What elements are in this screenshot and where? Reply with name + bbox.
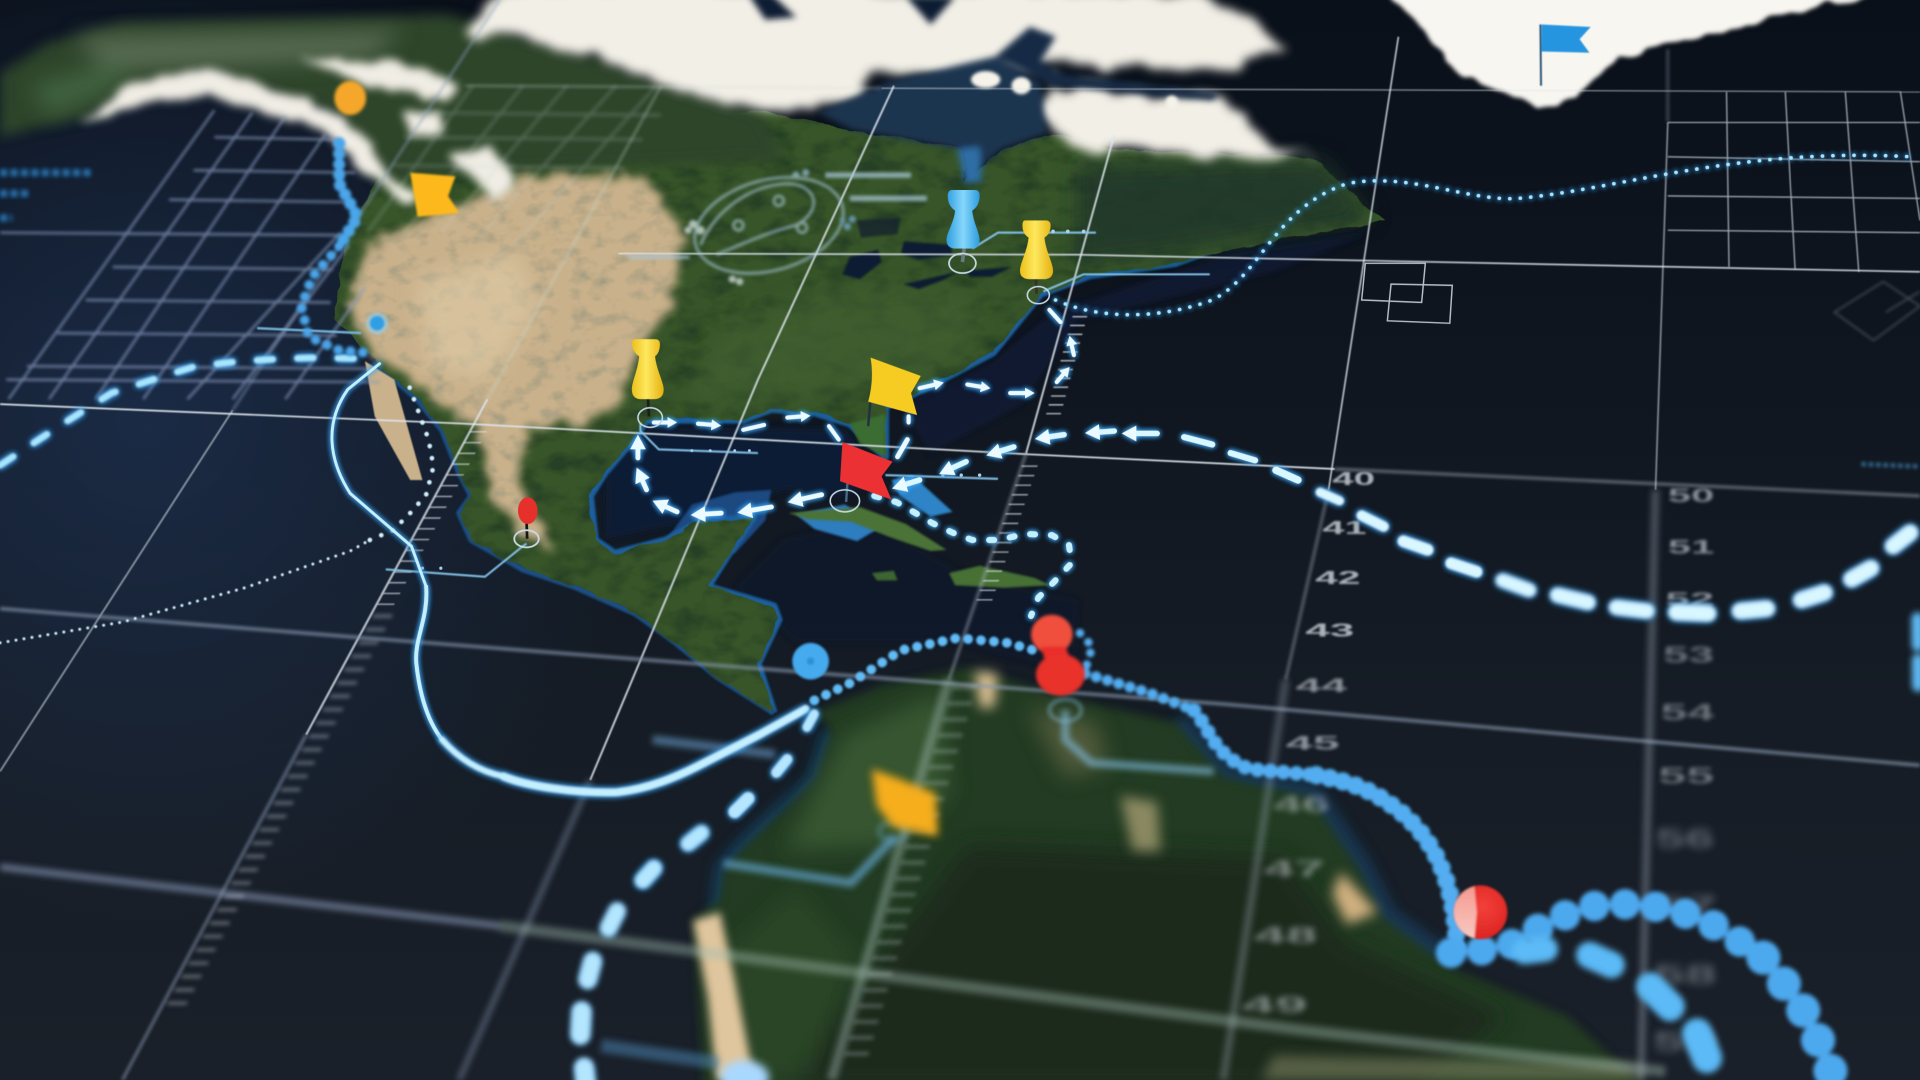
route: Atlantic oval dashes	[1524, 949, 1707, 1058]
scale labels 40 to 43: 42	[1315, 567, 1360, 588]
scale labels 53 to 55: 53	[1663, 641, 1714, 667]
route: Atlantic dashes far	[1502, 533, 1910, 613]
desert highlights	[416, 251, 539, 380]
scale labels 50 to 52: 51	[1668, 536, 1715, 558]
route: Pacific fine dotted	[0, 386, 433, 643]
route: Pacific south dashes far	[643, 833, 702, 880]
pin: Great Lakes blue	[947, 190, 980, 273]
scale labels 56 to 59: 59	[1653, 1027, 1717, 1057]
scale labels 46 to 49: 48	[1254, 922, 1318, 948]
Andes coastal desert	[693, 912, 754, 1080]
scale labels 53 to 55: 55	[1658, 763, 1714, 789]
route: Atlantic north dotted	[1056, 155, 1910, 315]
blue end blob at bottom	[720, 1060, 769, 1080]
grid lines in focus	[0, 37, 1920, 780]
route: Caribbean dotted loop	[874, 496, 1071, 616]
land colour variation	[31, 31, 1506, 1080]
flag: Florida yellow	[868, 358, 921, 426]
route: Atlantic dashes mid	[1320, 492, 1477, 572]
Caribbean islands	[789, 414, 1051, 588]
scale labels 56 to 59: 57	[1656, 891, 1717, 921]
tan patches on South America	[975, 671, 1647, 1080]
coastal blue shelf Atlantic and Gulf	[590, 245, 1224, 713]
scale labels 40 to 43: 40	[1332, 468, 1375, 489]
Yucatan shelf, Bahamas bank and Cuba shelf	[666, 475, 953, 553]
marker: west coast blue dot	[366, 312, 388, 334]
Hudson Bay and Arctic channels	[748, 0, 1220, 184]
scale labels 40 to 43: 41	[1322, 517, 1367, 538]
scale labels 53 to 55: 54	[1660, 699, 1714, 725]
scale labels 44 and 45: 45	[1286, 732, 1340, 754]
route: Pacific solid curve upper	[332, 364, 442, 740]
scale labels 46 to 49: 47	[1264, 856, 1325, 882]
fine mesh grid upper right	[1668, 92, 1920, 272]
scale labels 56 to 59	[1653, 823, 1717, 1057]
scale labels 44 and 45	[1286, 675, 1347, 754]
route: Pacific south dashes nearest viewer	[580, 911, 617, 1080]
South America base	[693, 667, 1647, 1080]
flag: Cuba red	[830, 442, 893, 512]
fine mesh grid over Canada	[367, 86, 661, 245]
flag: Colombia orange	[872, 769, 938, 836]
scale labels 50 to 52	[1665, 485, 1715, 611]
scale labels 46 to 49: 49	[1242, 992, 1308, 1018]
scale labels 53 to 55	[1658, 641, 1714, 789]
route: Atlantic dashes near coast	[904, 431, 1298, 485]
route: Pacific solid curve lower	[442, 709, 806, 792]
western desert	[350, 174, 683, 553]
route: Atlantic bead arc	[1451, 904, 1837, 1080]
scale ticks along meridians in focus	[382, 316, 1080, 612]
Great Lakes	[842, 218, 1011, 289]
ocean shelves and deep water	[380, 233, 1451, 967]
route: South America beaded left	[814, 638, 1038, 700]
grid lines blurred near viewer	[0, 490, 1665, 1080]
scale labels 50 to 52: 52	[1665, 589, 1715, 611]
left edge hud dashes	[0, 173, 93, 218]
Greenland	[1384, 0, 1898, 108]
scale labels 56 to 59: 58	[1653, 959, 1717, 989]
flag: Canada yellow	[410, 173, 459, 217]
scale ticks along meridians blurred	[176, 615, 965, 1065]
pin: Alaska orange	[334, 81, 366, 115]
marker: Panama blue dot	[792, 643, 829, 680]
North America base	[334, 110, 1384, 713]
pins: Venezuela red pair	[1031, 615, 1085, 696]
Arctic ice	[462, 0, 1310, 157]
route: South America beaded right	[1080, 633, 1457, 949]
ring under Colombia flag	[879, 822, 906, 841]
scale labels 50 to 52: 50	[1668, 485, 1715, 507]
scale labels 40 to 43	[1305, 468, 1375, 641]
fine mesh grid upper left	[0, 110, 380, 399]
scale labels 46 to 49: 46	[1273, 791, 1330, 817]
compass circles hud	[628, 162, 927, 289]
route: Pacific south dashes near	[735, 714, 814, 812]
scale labels 56 to 59: 56	[1656, 823, 1714, 853]
scale labels 46 to 49	[1242, 791, 1330, 1018]
route: Pacific dashed west	[0, 358, 361, 465]
connector lines blurred	[601, 710, 1213, 1063]
ice islands in Hudson Bay	[971, 71, 1178, 108]
ring under Venezuela pins	[1049, 699, 1081, 721]
diamond outlines marker	[1834, 282, 1920, 340]
route: Gulf of Mexico arrows	[638, 310, 1074, 514]
Alaska ice arc	[80, 59, 517, 202]
Gulf and Atlantic dark water	[606, 233, 1371, 673]
route: right edge dash	[1913, 618, 1920, 686]
pin: Texas yellow	[632, 339, 664, 427]
flag: Greenland blue	[1540, 24, 1591, 86]
coastal blue shelf Pacific	[380, 367, 774, 713]
Northern Canada and Alaska blurred land	[0, 15, 784, 184]
Baja California peninsula	[365, 361, 422, 480]
connector lines in focus	[257, 233, 1210, 577]
tick label at right edge	[1861, 464, 1920, 467]
pin: Mexico red	[514, 497, 539, 547]
pin: Brazil red ball	[1453, 885, 1507, 939]
route: Alaska dotted	[301, 143, 366, 353]
scale labels 44 and 45: 44	[1296, 675, 1347, 697]
small tick dots on connectors	[421, 230, 1086, 570]
square outlines marker	[1362, 263, 1452, 323]
South America soft coastal shelf	[716, 722, 1451, 967]
scale labels 40 to 43: 43	[1305, 620, 1354, 641]
pin: New York yellow	[1020, 220, 1053, 304]
